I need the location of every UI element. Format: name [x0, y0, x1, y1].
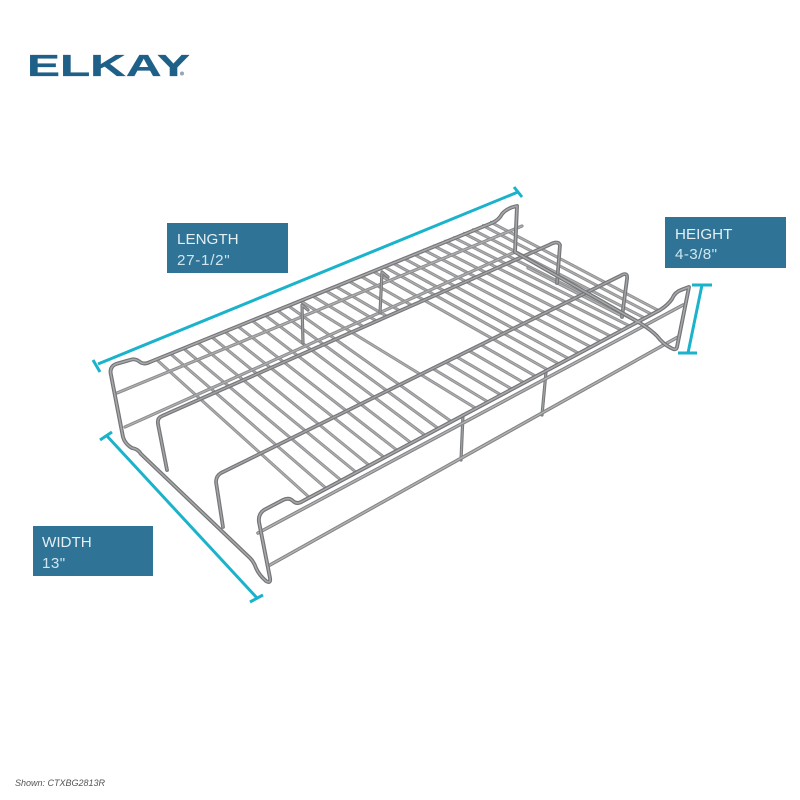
back rails [117, 226, 620, 427]
shelf opening [354, 302, 491, 373]
dimension line: height [678, 285, 712, 353]
label: length: LENGTH [177, 231, 239, 248]
label: width [33, 526, 153, 576]
label: height: HEIGHT [675, 226, 732, 243]
label: length: 27-1/2" [177, 252, 230, 269]
label: width: WIDTH [42, 534, 92, 551]
label: width: 13" [42, 555, 65, 572]
shelf wires [157, 222, 660, 498]
label: height [665, 217, 786, 268]
outer frame [111, 206, 689, 582]
dimension line: width [100, 432, 263, 602]
front rails [258, 305, 683, 565]
label: length [167, 223, 288, 273]
caption: model shown: Shown: CTXBG2813R [15, 778, 106, 788]
logo: Elkay: ELKAY [27, 49, 190, 83]
wire rack [111, 206, 689, 582]
logo: Elkay [27, 49, 190, 83]
short posts [302, 272, 546, 460]
label: height: 4-3/8" [675, 246, 717, 263]
dimension line: length [93, 187, 522, 372]
dividers [158, 242, 627, 527]
